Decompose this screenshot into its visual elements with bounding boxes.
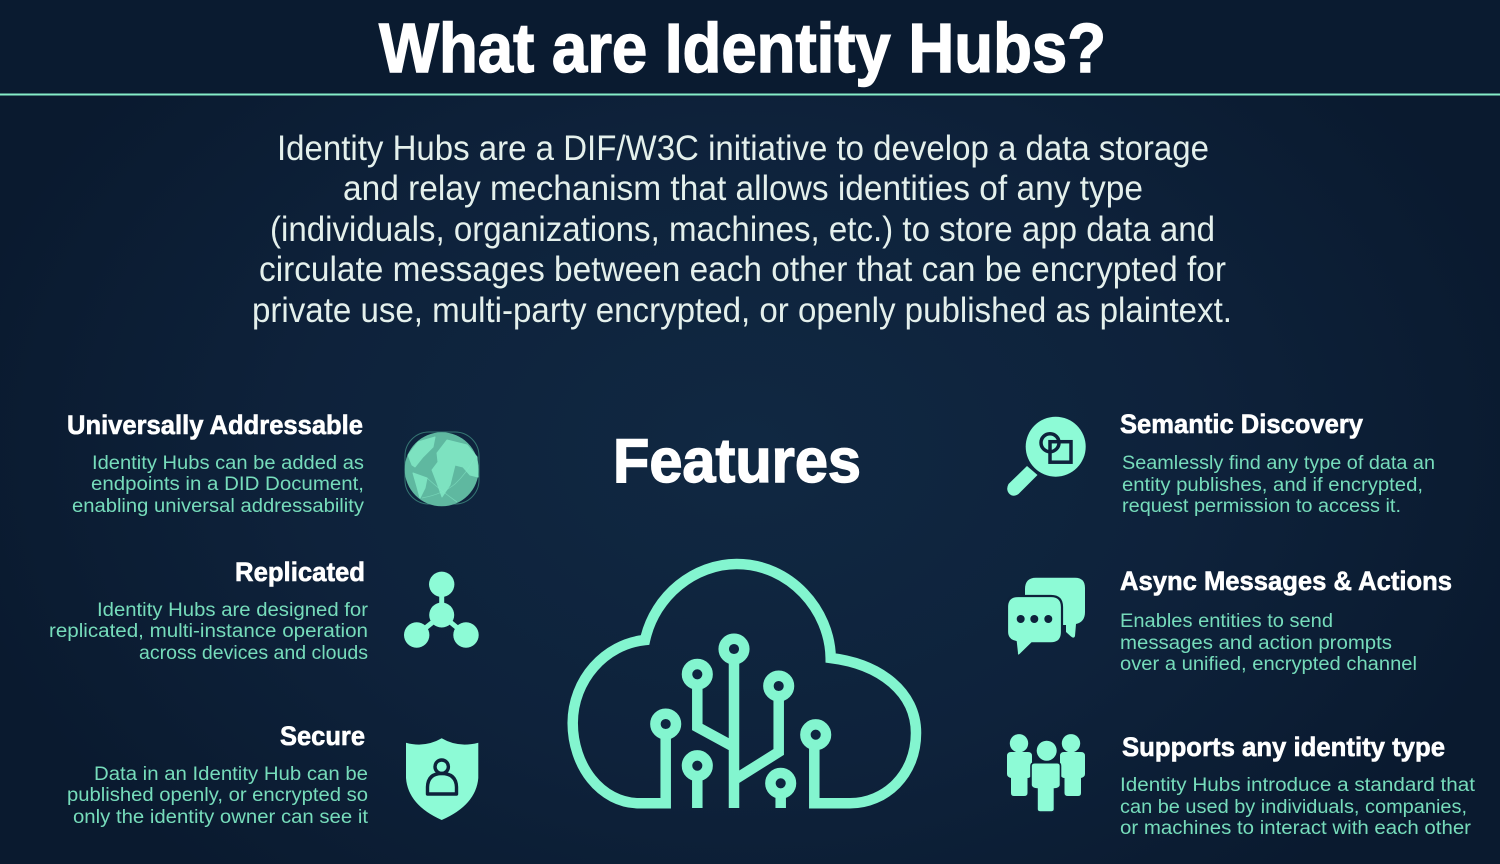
feature: Universally Addressable: Identity Hubs can be added as: [92, 453, 364, 474]
feature: Async Messages & Actions: messages and action prompts: [1120, 633, 1392, 654]
feature: Universally Addressable: enabling universal addressability: [72, 496, 365, 517]
feature: Secure: Secure: [280, 721, 365, 751]
feature: Universally Addressable: [67, 410, 365, 517]
intro paragraph: [252, 129, 1232, 330]
feature: Secure: Data in an Identity Hub can be: [94, 764, 368, 785]
heading: Features: Features: [613, 427, 861, 496]
feature: Supports any identity type: Identity Hubs introduce a standard that: [1120, 775, 1476, 796]
feature: Replicated: Identity Hubs are designed for: [97, 600, 369, 621]
feature: Secure: [67, 721, 369, 828]
feature: Semantic Discovery: Semantic Discovery: [1120, 409, 1363, 439]
feature: Universally Addressable: Universally Addressable: [67, 410, 363, 440]
icon: chat bubbles: [1007, 578, 1085, 656]
intro paragraph: and relay mechanism that allows identities of any type: [343, 169, 1143, 208]
feature: Async Messages & Actions: [1120, 566, 1452, 675]
feature: Supports any identity type: Supports any identity type: [1122, 732, 1445, 762]
icon: shield with person: [406, 738, 478, 820]
icon: magnifier: [1007, 417, 1086, 496]
title: What are Identity Hubs?: [379, 9, 1106, 87]
feature: Semantic Discovery: request permission to access it.: [1122, 496, 1401, 517]
icon: network nodes: [404, 572, 479, 648]
feature: Semantic Discovery: Seamlessly find any type of data an: [1122, 453, 1435, 474]
feature: Supports any identity type: or machines to interact with each other: [1120, 818, 1472, 839]
feature: Replicated: across devices and clouds: [139, 643, 368, 664]
icon: globe: [405, 432, 479, 506]
intro paragraph: private use, multi-party encrypted, or openly published as plaintext.: [252, 291, 1232, 330]
feature: Supports any identity type: [1120, 732, 1476, 839]
feature: Semantic Discovery: entity publishes, and if encrypted,: [1122, 475, 1423, 496]
feature: Universally Addressable: endpoints in a DID Document,: [91, 474, 364, 495]
intro paragraph: (individuals, organizations, machines, etc.) to store app data and: [270, 210, 1215, 249]
feature: Secure: published openly, or encrypted so: [67, 785, 368, 806]
illustration: circuit cloud: [573, 564, 916, 808]
feature: Async Messages & Actions: over a unified, encrypted channel: [1120, 654, 1417, 675]
intro paragraph: circulate messages between each other that can be encrypted for: [259, 250, 1226, 289]
feature: Semantic Discovery: [1120, 409, 1435, 517]
intro paragraph: Identity Hubs are a DIF/W3C initiative to develop a data storage: [277, 129, 1209, 168]
feature: Replicated: [49, 557, 369, 664]
feature: Secure: only the identity owner can see it: [73, 807, 369, 828]
feature: Async Messages & Actions: Async Messages & Actions: [1120, 566, 1452, 596]
feature: Supports any identity type: can be used by individuals, companies,: [1120, 797, 1467, 818]
feature: Replicated: replicated, multi-instance operation: [49, 621, 368, 642]
feature: Async Messages & Actions: Enables entities to send: [1120, 611, 1333, 632]
feature: Replicated: Replicated: [235, 557, 365, 587]
icon: group of people: [1007, 734, 1085, 812]
